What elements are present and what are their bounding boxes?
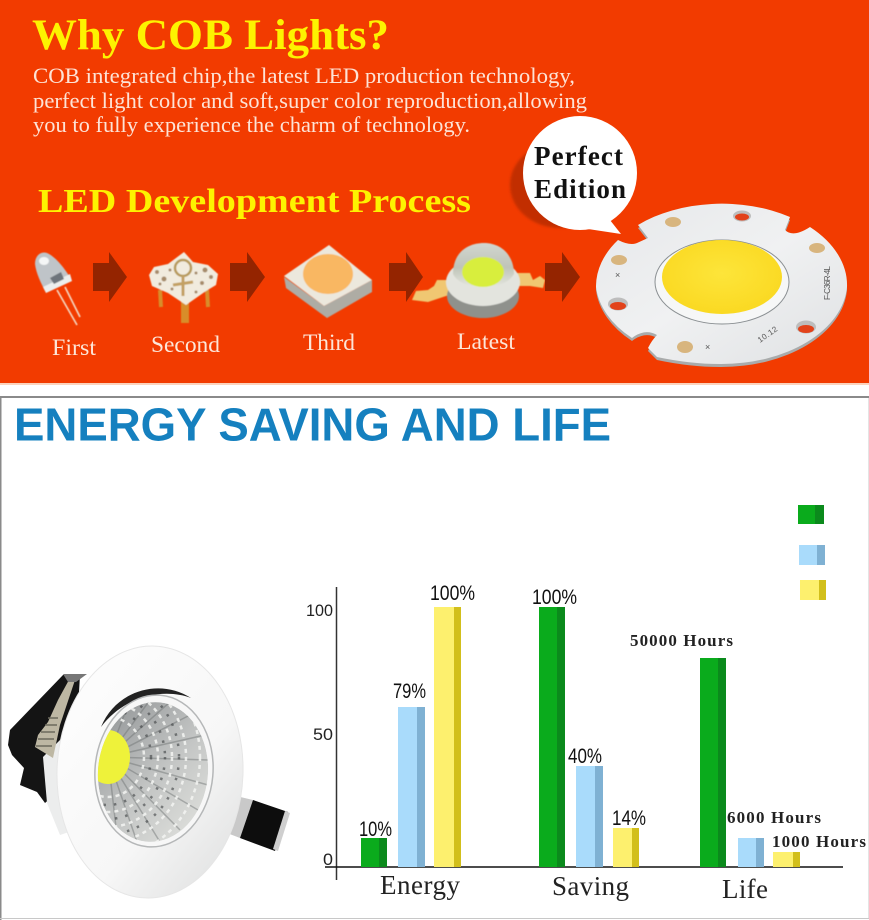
intro text: perfect light color and soft,super color reproduction,allowing (33, 88, 587, 113)
intro text: COB integrated chip,the latest LED production technology, (33, 63, 575, 88)
heading: LED development process: LED Development Process (38, 183, 471, 220)
intro text (33, 63, 587, 137)
icon: COB chip plate: F-C36R-4L (823, 265, 832, 300)
category labels: Energy (380, 870, 460, 900)
icon: COB chip plate: × (615, 270, 620, 280)
value labels: 40% (568, 745, 602, 768)
value labels: 79% (393, 680, 426, 703)
plug and wire (227, 795, 253, 838)
group: life bars (700, 658, 800, 867)
icon: COB chip plate: 10.12 (756, 324, 780, 345)
arrow 3 (389, 252, 423, 302)
intro text: you to fully experience the charm of technology. (33, 112, 470, 137)
value labels: 14% (612, 807, 646, 830)
value labels (359, 582, 646, 841)
housing edge (43, 730, 75, 835)
value labels: 100% (532, 586, 577, 609)
value labels: 10% (359, 818, 392, 841)
COB chip (98, 730, 130, 784)
spring clip (35, 678, 75, 758)
title: Why COB Lights? (32, 12, 389, 59)
step labels: Second (151, 332, 220, 357)
outer ring (53, 643, 247, 901)
panel: energy saving and life (0, 396, 869, 920)
icon: latest LED (412, 243, 545, 318)
step labels: Third (303, 330, 355, 355)
hours labels: 1000 Hours (772, 832, 866, 851)
callout: perfect edition: Perfect (534, 141, 623, 171)
legend swatches (798, 505, 826, 600)
step labels: Latest (457, 329, 516, 354)
step labels: First (52, 335, 97, 360)
arrow 2 (230, 252, 265, 302)
axis values: 50 (313, 725, 333, 744)
category labels: Saving (552, 871, 629, 901)
callout: perfect edition (510, 116, 637, 234)
icon: COB chip plate (596, 204, 847, 367)
arrow 1 (93, 252, 127, 302)
axis values: 0 (323, 850, 333, 869)
axis values (306, 601, 333, 869)
icon: third LED SMD (284, 245, 372, 318)
step labels (52, 329, 516, 360)
value labels: 100% (430, 582, 475, 605)
icon: COB chip plate: × (705, 342, 710, 352)
heat sink (8, 675, 80, 803)
category labels: Life (722, 874, 768, 904)
icon: first LED (35, 252, 80, 325)
group: saving bars (539, 607, 639, 867)
axis values: 100 (306, 601, 333, 620)
icon: COB downlight (8, 643, 290, 901)
icon: second LED (149, 252, 218, 323)
bar chart (306, 582, 866, 904)
callout: perfect edition: Edition (534, 174, 626, 204)
heading: energy saving and life: ENERGY SAVING AND LIFE (14, 398, 611, 450)
category labels (380, 870, 768, 904)
arrow 4 (545, 252, 580, 302)
reflector cup (98, 702, 208, 842)
panel: why COB lights (0, 0, 869, 385)
hours labels (630, 631, 866, 851)
hours labels: 6000 Hours (727, 808, 821, 827)
hours labels: 50000 Hours (630, 631, 733, 650)
axes (336, 587, 338, 880)
group: energy bars (361, 607, 461, 867)
